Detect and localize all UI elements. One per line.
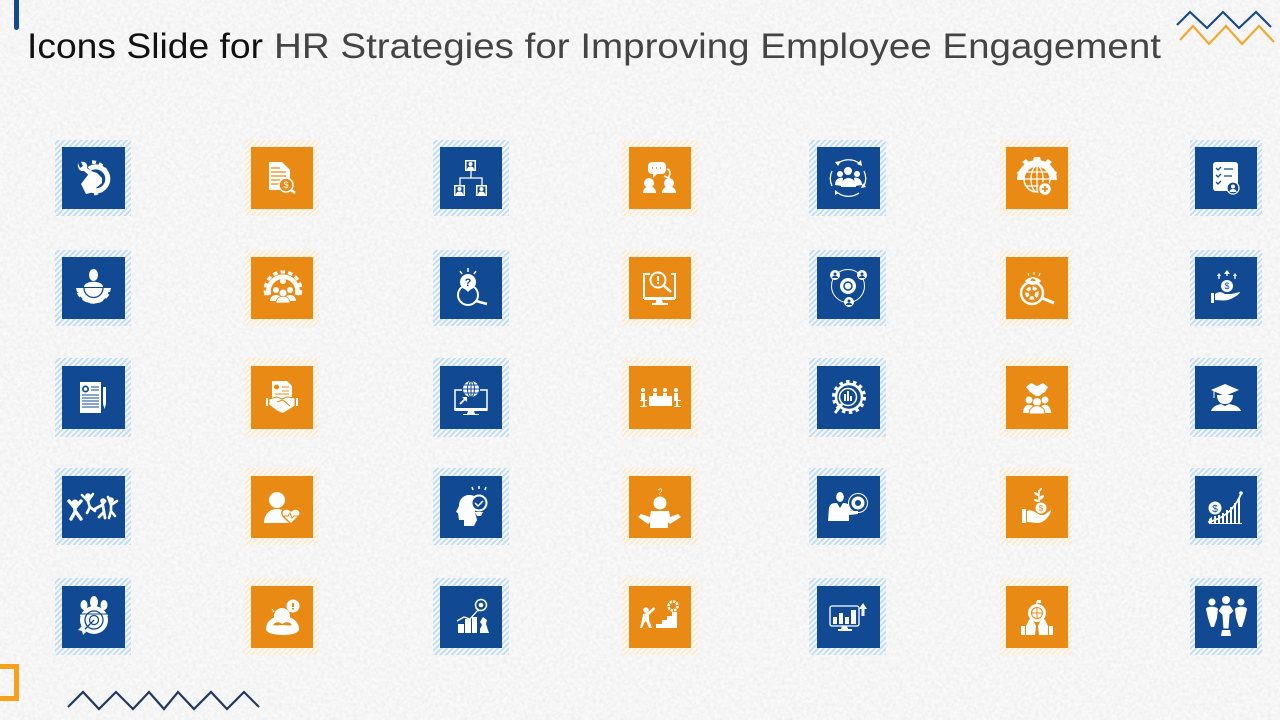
- tile: row 2 column 5: [809, 250, 886, 326]
- tile: row 1 column 4: [622, 140, 698, 216]
- icon: thinking person with idea bubble: [266, 600, 300, 635]
- tile: row 1 column 6: [1000, 140, 1072, 216]
- tile: row 3 column 4: [622, 358, 698, 437]
- tile: row 4 column 4: [622, 468, 698, 545]
- tile: row 5 column 3: [433, 578, 509, 655]
- icon: question bulb with magnifier: ?: [465, 277, 472, 289]
- icon: resume with pen: [80, 382, 106, 413]
- tile: row 5 column 6: [1000, 578, 1072, 655]
- tile: row 1 column 1: [55, 140, 131, 216]
- tile: row 2 column 6: [1000, 250, 1072, 326]
- tile: row 2 column 2: [245, 250, 319, 326]
- icon: coin and growth bar chart: $: [1212, 504, 1218, 515]
- tile: row 3 column 2: [245, 358, 319, 437]
- decoration: top right zigzag lines: [1177, 12, 1274, 44]
- icon: person behind half gear: [76, 269, 111, 304]
- tile: row 4 column 3: [433, 468, 509, 545]
- icon: gear with globe and plus badge: [1017, 157, 1057, 196]
- icon: two people talking: [643, 162, 676, 193]
- icon: person reaching for gear on stairs: [640, 602, 678, 628]
- icon: hand with wrench and gear: [78, 162, 108, 194]
- icon: hand with coin and plant: $: [1039, 504, 1044, 513]
- tile: row 2 column 1: [55, 250, 131, 326]
- tile: row 5 column 4: [622, 578, 698, 655]
- tile: row 4 column 2: [245, 468, 319, 545]
- icon: graduate with cap: [1211, 384, 1241, 411]
- tile: row 5 column 7: [1190, 578, 1262, 655]
- icon: gear with chart under magnifier: [834, 382, 864, 413]
- title: HR Strategies for Improving Employee Engagement: [274, 26, 1161, 66]
- tile: row 4 column 6: [1000, 468, 1072, 545]
- icon: thumbs up holding globe medal: [1021, 600, 1053, 635]
- icon: handshake over team: [1023, 383, 1051, 414]
- icon: confused person shrugging: ?: [657, 487, 663, 497]
- icon: gear with team: [265, 272, 301, 303]
- icon: contract with handshake: [266, 381, 298, 413]
- icon: businessman with target: [828, 492, 868, 521]
- tile: row 3 column 5: [809, 358, 886, 437]
- tile: row 3 column 6: [1000, 358, 1072, 437]
- tile: row 2 column 4: [622, 250, 698, 326]
- icon: monitor with magnifier: [644, 272, 675, 305]
- icon: four jumping people: [69, 493, 117, 519]
- title: Icons Slide for: [27, 26, 263, 66]
- tile: row 4 column 7: [1190, 468, 1262, 545]
- icon: document with dollar magnifier: $: [283, 180, 289, 190]
- decoration: bottom left orange square: [0, 666, 16, 698]
- tile: row 3 column 3: [433, 358, 509, 437]
- icon: person with heartbeat heart: [264, 492, 300, 524]
- tile: row 1 column 2: [245, 140, 319, 216]
- tile: row 1 column 5: [809, 140, 886, 216]
- tile: row 5 column 2: [245, 578, 319, 655]
- icon: team with circular arrows: [830, 160, 866, 196]
- icon: growth bars, chess piece and coin: [457, 600, 489, 633]
- tile: row 5 column 5: [809, 578, 886, 655]
- tile: row 1 column 7: [1190, 140, 1262, 216]
- icon: meeting around a table: [640, 388, 681, 407]
- tile: row 3 column 1: [55, 358, 131, 437]
- tile: row 4 column 1: [55, 468, 131, 545]
- tile: row 3 column 7: [1190, 358, 1262, 437]
- icon: hand holding coin with arrows: $: [1224, 281, 1230, 291]
- decoration: bottom zigzag line: [68, 692, 259, 709]
- icon: three people around central gear: [830, 270, 867, 307]
- tile: row 4 column 5: [809, 468, 886, 545]
- tile: row 2 column 7: [1190, 250, 1262, 326]
- icon: eye and gear under magnifier: [1021, 272, 1054, 304]
- icon: head with check bulb: [456, 486, 486, 526]
- icon: team behind target with arrow: [78, 596, 108, 635]
- icon: checklist with person badge: [1213, 162, 1239, 194]
- tile: row 1 column 3: [433, 140, 509, 216]
- icon: monitor with globe and arrow: [455, 381, 487, 415]
- tile: row 5 column 1: [55, 578, 131, 655]
- icon: organisation chart: [454, 160, 487, 196]
- accent bar: top left: [14, 0, 19, 30]
- icon: monitor with rising bars: [830, 603, 867, 631]
- tile: row 2 column 3: [433, 250, 509, 326]
- icon: three business people with leader: [1206, 596, 1247, 636]
